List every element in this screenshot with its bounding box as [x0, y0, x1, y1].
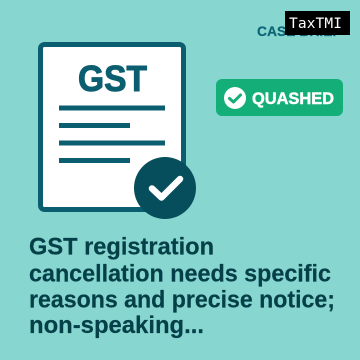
document text lines: [59, 106, 165, 163]
icon: GST document: [40, 44, 196, 219]
TaxTMI watermark: [285, 11, 350, 35]
icon: check circle: [134, 157, 196, 219]
badge text: QUASHED: [252, 89, 334, 108]
badge: quashed: [216, 79, 343, 116]
TaxTMI watermark: TaxTMI: [289, 16, 342, 32]
document heading: GST: GST: [78, 58, 147, 99]
icon: badge check: [224, 87, 246, 109]
title: cancellation needs specific: [29, 260, 331, 288]
title: non-speaking...: [29, 312, 204, 339]
title: reasons and precise notice;: [29, 286, 335, 314]
document page: [40, 44, 184, 210]
title: GST registration: [29, 234, 214, 260]
label: case status: CASE BRIEF: [257, 23, 341, 39]
title: [29, 234, 335, 339]
